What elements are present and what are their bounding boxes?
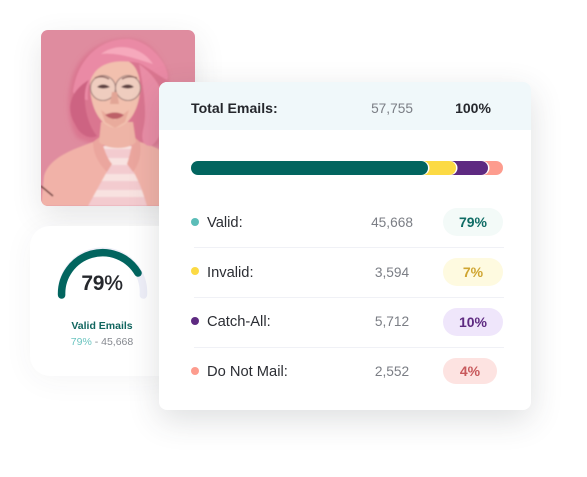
face (90, 58, 140, 128)
row: catch-all: 5,712 (375, 314, 409, 329)
gauge title: Valid Emails (71, 320, 133, 332)
jacket left (41, 142, 110, 206)
panel: gauge card (30, 226, 180, 376)
photo: woman with pink hair (41, 30, 195, 206)
gauge value: 79% (81, 272, 123, 295)
shirt (88, 146, 149, 206)
neck (99, 122, 136, 148)
hair left (70, 80, 97, 137)
row: invalid: 3,594 (375, 265, 409, 280)
row: invalid (191, 258, 503, 286)
hair top sweep (73, 39, 168, 100)
header count: 57,755 (371, 101, 413, 116)
row: do not mail: 2,552 (375, 364, 409, 379)
row: do not mail: Do Not Mail: (207, 364, 288, 380)
row: valid: Valid: (207, 215, 243, 231)
table header band (159, 82, 531, 130)
back hair (69, 39, 168, 148)
nose and lips (110, 92, 119, 104)
chart: valid emails gauge (58, 248, 147, 299)
row: catch-all: Catch-All: (207, 314, 271, 330)
header percent: 100% (455, 100, 491, 116)
hair right (139, 64, 165, 146)
glasses (90, 76, 116, 100)
row: valid (191, 208, 503, 236)
row: catch-all: 10% (459, 314, 487, 330)
row: valid: 79% (459, 214, 487, 230)
jacket right (130, 142, 184, 206)
collars (93, 136, 112, 172)
panel: email results table (159, 82, 531, 410)
header label: Total Emails: (191, 100, 278, 116)
row: do not mail: 4% (460, 363, 480, 379)
row: valid: 45,668 (371, 215, 413, 230)
gauge subtitle: 79% - 45,668 (71, 336, 133, 348)
row: catch-all (191, 308, 503, 336)
row: invalid: 7% (463, 264, 483, 280)
row: invalid: Invalid: (207, 265, 254, 281)
